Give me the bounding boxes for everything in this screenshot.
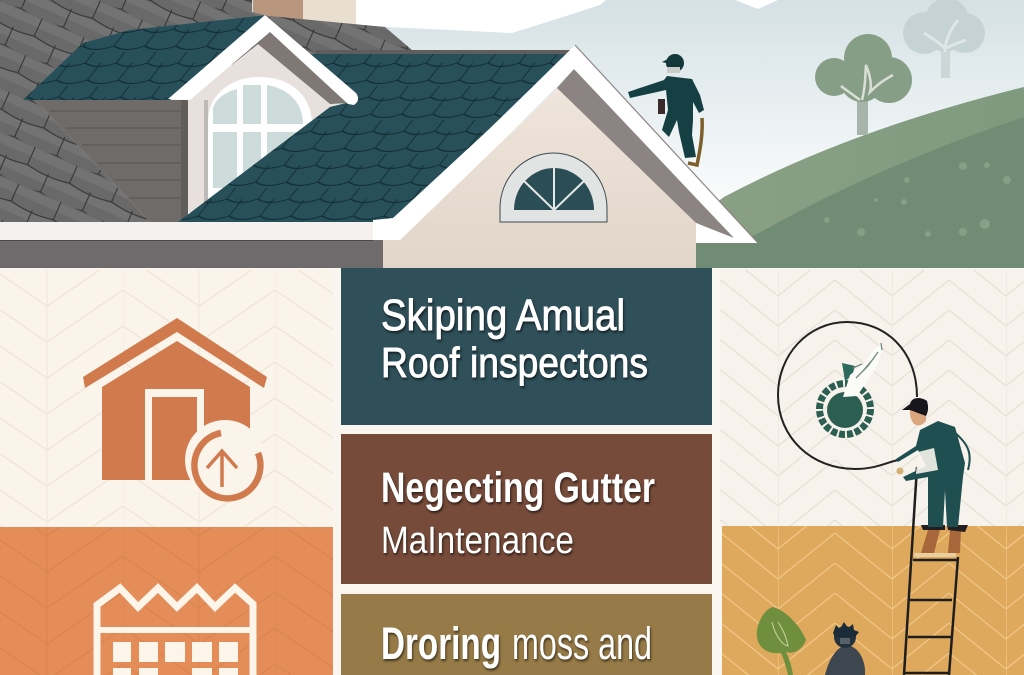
panel: orange left background — [0, 527, 333, 675]
heading: maintenance: MaIntenance — [381, 520, 574, 562]
icon: green leaf — [757, 607, 806, 675]
icon: pale distant tree — [903, 0, 985, 78]
scene: sky and mountains — [0, 0, 1024, 268]
dormer front wall — [188, 44, 335, 212]
heading: skipping inspections line two: Roof inspectons — [381, 339, 648, 386]
dormer gable trim — [168, 15, 358, 105]
icon: green tree — [815, 34, 912, 135]
roof: main teal shingles — [178, 54, 566, 222]
heading: droring: Droring — [381, 618, 501, 669]
icon: house with upload arrow — [83, 318, 267, 500]
heading: neglecting gutter: Negecting Gutter — [381, 464, 655, 512]
dormer window — [204, 77, 312, 210]
worker on the roof — [628, 54, 704, 165]
dormer siding — [35, 100, 188, 222]
gable trim — [373, 45, 758, 243]
roof: dormer teal shingles — [23, 15, 267, 100]
roof: grey shingles — [0, 0, 570, 222]
heading: moss and: moss and — [512, 618, 652, 669]
icon: shingle seal with lifting tile — [820, 343, 882, 434]
chimney — [253, 0, 356, 25]
panel: cream right background — [720, 270, 1024, 526]
gutter and lower wall — [0, 222, 384, 268]
worker on the ladder — [896, 398, 970, 553]
gable wall — [383, 88, 696, 268]
panel: skipping annual roof inspections — [341, 268, 712, 425]
icon: crouching dark figure — [825, 622, 865, 675]
panel: ignoring moss — [341, 594, 712, 675]
heading: skipping inspections line one: Skiping Amual — [381, 291, 625, 340]
icon: magnifier loop — [778, 322, 917, 469]
panel: cream left background — [0, 270, 333, 527]
icon: calendar — [97, 588, 253, 675]
panel: yellow right background — [722, 526, 1024, 675]
panel: neglecting gutter maintenance — [341, 434, 712, 584]
half-moon attic window — [500, 153, 607, 222]
ladder — [904, 467, 958, 675]
scene: green hills — [696, 87, 1024, 268]
